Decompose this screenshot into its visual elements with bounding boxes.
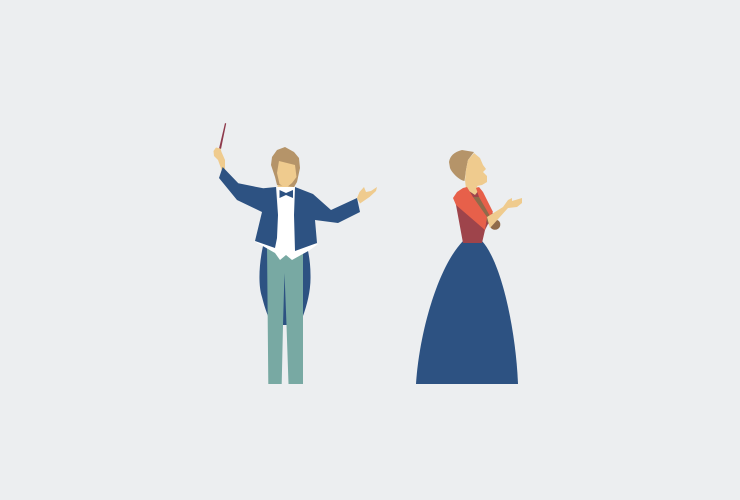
hair xyxy=(271,147,300,187)
bodice xyxy=(456,190,493,243)
baton xyxy=(219,123,226,149)
trousers xyxy=(267,245,303,384)
far arm and hand xyxy=(473,197,500,230)
hair xyxy=(449,150,474,181)
jacket right panel xyxy=(294,187,360,251)
strap xyxy=(476,187,493,216)
jacket left panel xyxy=(219,167,278,248)
jacket tails xyxy=(259,246,311,325)
bow tie xyxy=(280,190,293,198)
gown xyxy=(416,241,518,384)
open hand xyxy=(357,187,377,204)
orange sleeve xyxy=(453,187,487,230)
raised hand xyxy=(214,148,225,171)
neck xyxy=(277,178,295,196)
conductor figure xyxy=(214,123,377,384)
shirt and white hem xyxy=(254,187,318,260)
singer figure xyxy=(416,150,522,384)
face and neck xyxy=(465,153,487,195)
forearm and hand xyxy=(487,198,522,228)
face xyxy=(277,161,296,188)
